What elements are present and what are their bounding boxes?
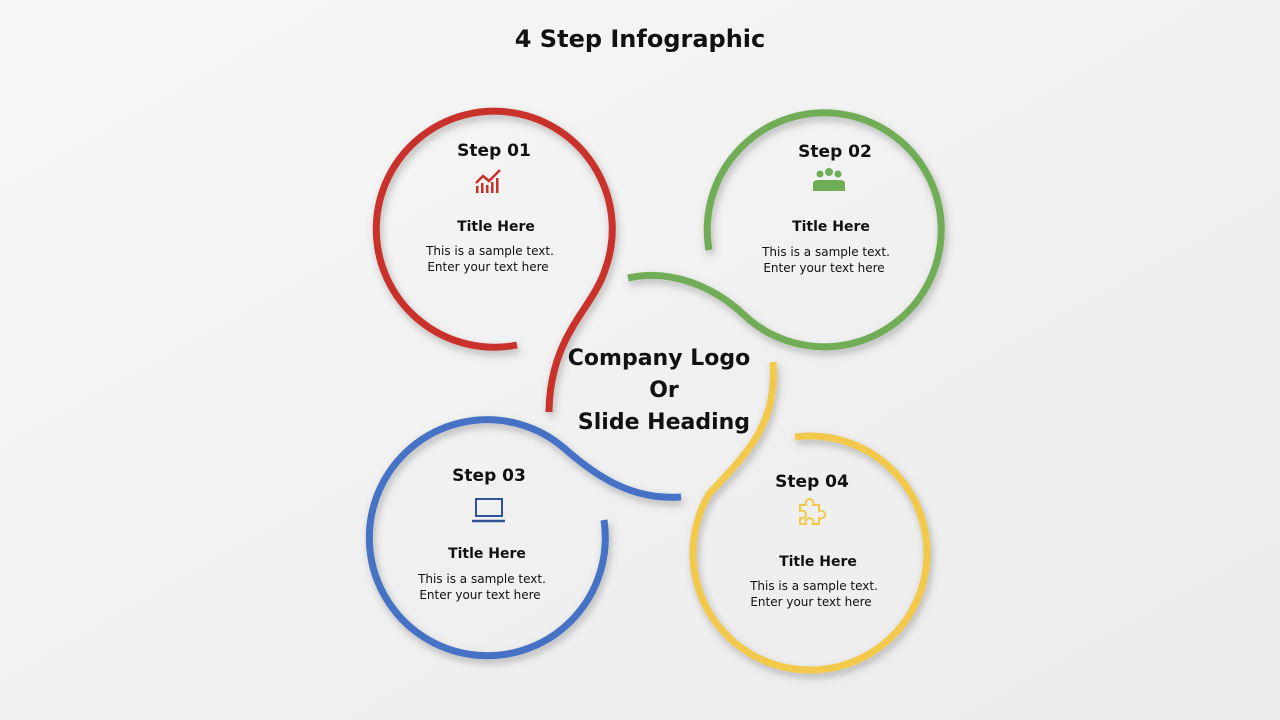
- panel: step 01: Step 01: [457, 141, 531, 161]
- connector: green step 02: [628, 113, 941, 347]
- panel: step 04: Title Here: [779, 554, 857, 570]
- title: 4 Step Infographic: [515, 25, 765, 53]
- panel: step 03: Title Here: [448, 546, 526, 562]
- center heading: Slide Heading: [578, 410, 750, 435]
- panel: step 02: [761, 142, 890, 275]
- panel: step 01: Title Here: [457, 219, 535, 235]
- panel: step 02: Step 02: [798, 142, 872, 162]
- panel: step 01: [425, 141, 554, 274]
- panel: step 04: This is a sample text.: [749, 579, 878, 593]
- connector: blue step 03: [369, 420, 681, 656]
- panel: step 03: Step 03: [452, 466, 526, 486]
- icon: team: [813, 168, 845, 191]
- center heading: Or: [649, 378, 679, 403]
- center heading: [568, 346, 750, 435]
- panel: step 04: Enter your text here: [750, 595, 872, 609]
- panel: step 03: [417, 466, 546, 602]
- icon: puzzle: [800, 499, 825, 524]
- center heading: Company Logo: [568, 346, 750, 371]
- panel: step 04: Step 04: [775, 472, 849, 492]
- panel: step 04: [749, 472, 878, 609]
- connector: red step 01: [376, 111, 612, 412]
- icon: chart: [476, 170, 500, 193]
- panel: step 02: Title Here: [792, 219, 870, 235]
- icon: laptop: [472, 499, 505, 521]
- panel: step 02: Enter your text here: [763, 261, 885, 275]
- panel: step 02: This is a sample text.: [761, 245, 890, 259]
- panel: step 03: This is a sample text.: [417, 572, 546, 586]
- panel: step 03: Enter your text here: [419, 588, 541, 602]
- connector: yellow step 04: [693, 362, 927, 670]
- panel: step 01: Enter your text here: [427, 260, 549, 274]
- panel: step 01: This is a sample text.: [425, 244, 554, 258]
